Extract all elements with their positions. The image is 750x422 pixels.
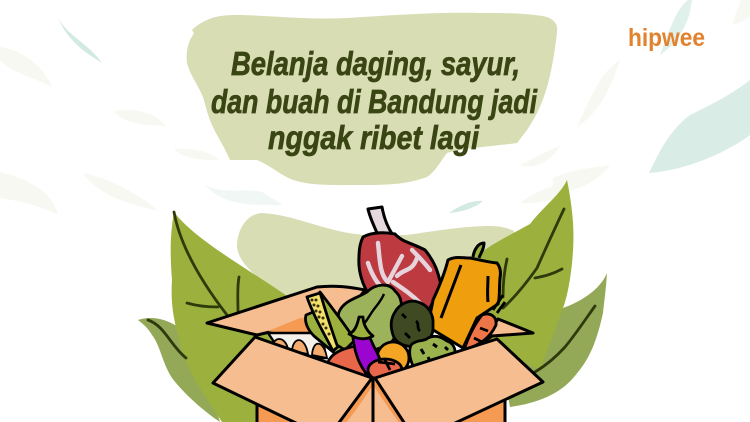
cardboard box front bbox=[213, 337, 543, 422]
icon: green bush vegetable bbox=[410, 336, 455, 368]
right front flap bbox=[375, 339, 543, 422]
icon: apple bbox=[328, 346, 367, 380]
inner box shadow bbox=[268, 318, 340, 345]
icon: bell pepper bbox=[429, 243, 501, 348]
icon: corn bbox=[305, 292, 355, 356]
left back flap bbox=[207, 286, 365, 335]
big right leaf bbox=[478, 180, 573, 370]
big left leaf bbox=[171, 212, 290, 422]
right leaves bbox=[478, 180, 607, 407]
right back flap bbox=[480, 319, 533, 345]
box centre fold bbox=[372, 378, 374, 422]
small right leaf bbox=[500, 273, 607, 407]
headline text: dan buah di Bandung jadi bbox=[211, 83, 538, 120]
headline text: nggak ribet lagi bbox=[268, 119, 480, 156]
left front flap bbox=[213, 337, 372, 422]
headline text bbox=[211, 45, 538, 156]
small left leaf bbox=[138, 318, 220, 422]
box front wall bbox=[257, 378, 505, 422]
pale blob behind box bbox=[237, 213, 514, 330]
left leaf veins bbox=[148, 212, 239, 358]
left leaves bbox=[138, 212, 290, 422]
egg tray bbox=[268, 333, 327, 358]
right leaf veins bbox=[503, 209, 595, 372]
cardboard box back flaps bbox=[207, 286, 533, 345]
icon: meat bbox=[359, 207, 441, 312]
logo: hipwee: hipwee bbox=[628, 24, 705, 52]
icon: tomato bbox=[368, 359, 402, 381]
background drifting leaves bbox=[0, 0, 750, 215]
icon: broccoli bbox=[391, 301, 433, 347]
icon: eggplant bbox=[349, 317, 382, 376]
icon: carrot bbox=[464, 295, 505, 350]
lighter box triangles bbox=[345, 385, 400, 422]
icon: lettuce bbox=[338, 285, 401, 352]
headline blob bbox=[187, 13, 557, 185]
icon: orange bbox=[377, 342, 409, 374]
headline text: Belanja daging, sayur, bbox=[231, 45, 520, 82]
